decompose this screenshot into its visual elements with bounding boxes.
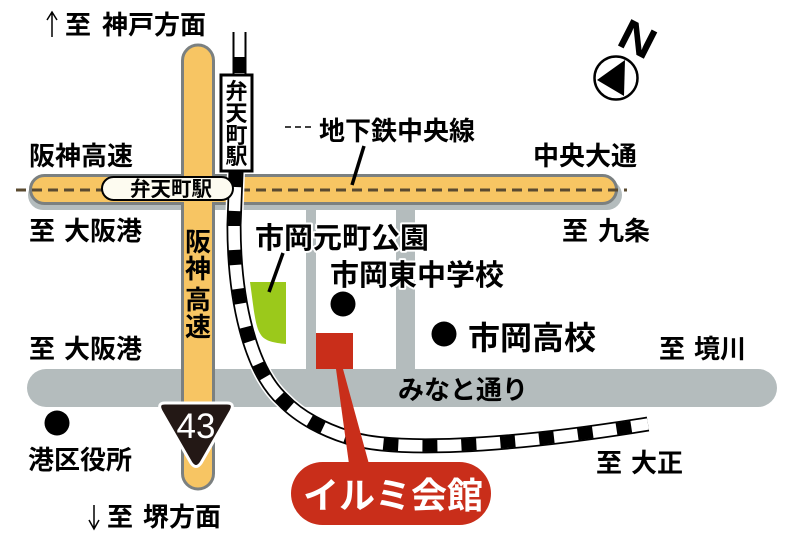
label: to taisho: 至 [596,448,622,478]
station label: vertical sign: 駅 [225,144,248,169]
route 43 shield: 43 [177,407,215,446]
marker: ward office [44,410,70,436]
marker: junior high [330,292,356,316]
marker: high school [432,322,456,346]
label: park: 市岡元町公園 [255,222,429,255]
expressway: vertical hanshin [182,45,214,489]
arrow: north [47,12,57,37]
leader: subway [352,146,364,185]
label: minato dori: みなと通り [398,375,528,405]
label: to taisho: 大正 [631,448,683,478]
label: to kujo: 九条 [598,216,650,246]
venue callout [291,369,491,525]
road: minato dori [27,369,777,407]
label: hanshin expressway: 阪神高速 [29,141,133,171]
label: to kujo: 至 [562,216,588,246]
station label: vertical sign [221,75,252,171]
label: to sakaigawa: 境川 [694,334,746,364]
label: to kobe: 神戸方面 [102,10,206,40]
park: green area [250,282,286,344]
label: high school: 市岡高校 [468,320,596,356]
station label: horizontal pill [102,177,233,201]
label: ward office: 港区役所 [28,445,132,475]
expressway label: vertical: 速 [185,312,211,342]
label: junior high: 市岡東中学校 [330,259,504,292]
station label: horizontal pill: 弁天町駅 [130,177,212,201]
expressway junction [184,173,212,211]
leader: park [269,253,283,292]
label: to kobe: 至 [65,10,91,40]
venue marker: red square [316,333,353,369]
label: to sakaigawa: 至 [659,334,685,364]
expressway label: vertical [185,227,211,342]
subway dashed line [16,188,627,192]
arrow: south [89,505,99,529]
compass: N [611,9,665,68]
label: subway legend: 地下鉄中央線 [319,116,475,146]
expressway: horizontal hanshin [30,176,616,204]
expressway label: vertical: 高 [185,285,211,315]
label: to osaka port upper: 大阪港 [64,216,142,246]
road shadow: chuo odori [28,180,622,210]
station label: vertical sign: 町 [225,123,248,148]
route 43 shield [160,403,232,466]
label: to osaka port lower: 至 [29,334,55,364]
venue callout: イルミ会館 [303,475,483,516]
label: to sakai: 至 [107,502,133,532]
railway line [234,32,648,446]
label: to osaka port upper: 至 [29,216,55,246]
station label: vertical sign: 弁 [225,79,248,104]
label: to sakai: 堺方面 [143,502,221,532]
side roads [306,205,415,371]
station label: vertical sign: 天 [225,101,248,126]
label: to osaka port lower: 大阪港 [64,334,142,364]
expressway label: vertical: 神 [185,254,211,284]
label: chuo odori: 中央大通 [533,141,637,171]
compass [594,9,665,100]
expressway label: vertical: 阪 [185,227,211,257]
